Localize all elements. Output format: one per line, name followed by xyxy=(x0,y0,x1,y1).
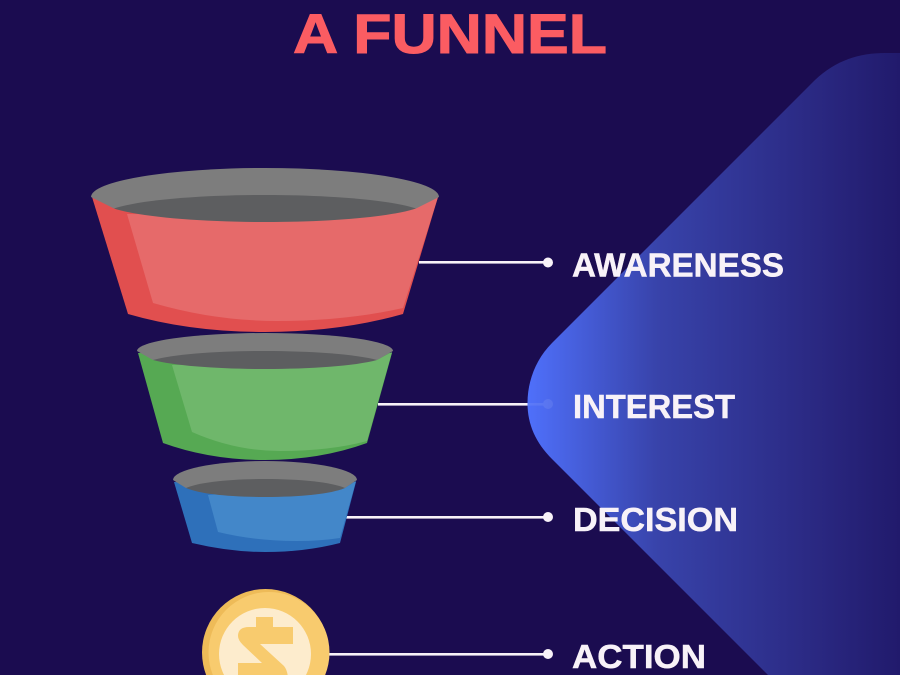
label: action: ACTION xyxy=(572,639,706,675)
label: decision: DECISION xyxy=(573,502,738,539)
blue gradient background shape xyxy=(528,53,900,675)
connector lines xyxy=(329,258,553,659)
funnel stage: awareness (red) xyxy=(91,168,439,332)
label: awareness: AWARENESS xyxy=(572,248,784,284)
funnel stage: decision (blue) xyxy=(173,461,357,552)
interest connector seen through the blue shape xyxy=(528,399,553,409)
label: interest: INTEREST xyxy=(573,389,736,426)
funnel stage: interest (green) xyxy=(137,333,393,460)
title: A FUNNEL xyxy=(293,2,607,65)
icon: dollar coin (action) xyxy=(202,589,330,675)
